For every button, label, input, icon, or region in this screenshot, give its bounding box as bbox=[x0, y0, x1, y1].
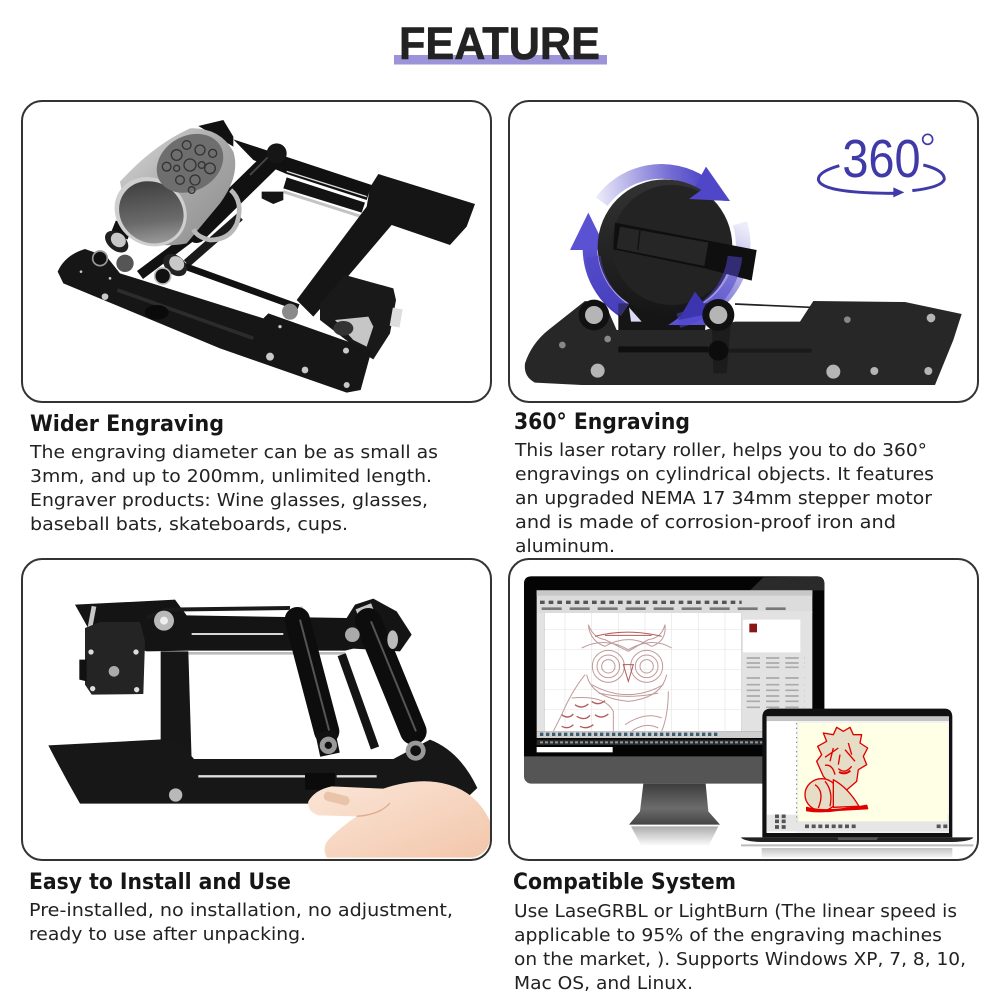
body text: and is made of corrosion-proof iron and bbox=[515, 512, 896, 533]
purple overlay on knob bbox=[678, 257, 735, 321]
vertical arm bbox=[161, 651, 192, 761]
red chibi line drawing bbox=[805, 727, 868, 812]
stepper motor bbox=[320, 275, 396, 359]
heading: Compatible System bbox=[513, 870, 736, 895]
body text: Mac OS, and Linux. bbox=[514, 973, 693, 994]
body text: applicable to 95% of the engraving machines bbox=[514, 925, 942, 946]
heading: Easy to Install and Use bbox=[29, 870, 291, 895]
drive belt bbox=[177, 263, 298, 307]
monitor bbox=[524, 576, 824, 846]
screws bbox=[80, 270, 350, 388]
panel frame bbox=[22, 101, 491, 402]
panel: 360 engraving bbox=[509, 101, 978, 557]
panel frame bbox=[509, 559, 978, 860]
product photo: rotary roller with mug bbox=[58, 120, 475, 393]
body text: This laser rotary roller, helps you to do 360° bbox=[514, 440, 927, 461]
hand bbox=[308, 781, 492, 860]
heading: 360° Engraving bbox=[514, 410, 690, 435]
body text: baseball bats, skateboards, cups. bbox=[30, 514, 348, 535]
body text: ready to use after unpacking. bbox=[29, 924, 306, 945]
heading: Wider Engraving bbox=[30, 412, 224, 437]
handle bbox=[613, 223, 757, 281]
owl line drawing bbox=[553, 625, 672, 731]
product photo: roller with hand bbox=[48, 599, 492, 860]
body text bbox=[29, 442, 438, 535]
base plate bbox=[58, 249, 372, 393]
panel frame bbox=[509, 101, 978, 402]
rollers bbox=[295, 606, 426, 761]
title text: FEATURE bbox=[399, 18, 600, 69]
title bbox=[394, 18, 607, 69]
software on monitor and laptop bbox=[524, 576, 973, 860]
body text: Use LaseGRBL or LightBurn (The linear speed is bbox=[514, 901, 957, 922]
panel: compatible system bbox=[509, 559, 978, 994]
panel: easy to install and use bbox=[22, 559, 492, 945]
body text: aluminum. bbox=[515, 536, 615, 557]
rear frame bbox=[75, 599, 412, 651]
360 degree icon bbox=[818, 130, 944, 197]
body text: Pre-installed, no installation, no adjustment, bbox=[29, 900, 453, 921]
mug bbox=[101, 122, 239, 260]
laptop bbox=[741, 709, 973, 860]
body text: Engraver products: Wine glasses, glasses, bbox=[30, 490, 428, 511]
body text bbox=[514, 901, 966, 994]
body text: on the market, ). Supports Windows XP, 7, 8, 10, bbox=[514, 949, 966, 970]
rollers and screws bbox=[559, 299, 935, 379]
body text: 3mm, and up to 200mm, unlimited length. bbox=[30, 466, 432, 487]
body text bbox=[514, 440, 934, 557]
360 degree icon: 360 bbox=[842, 130, 921, 189]
cross arm and rear plate bbox=[297, 174, 475, 317]
panel: wider engraving bbox=[22, 101, 491, 535]
base plate bbox=[525, 301, 962, 385]
rollers bbox=[197, 155, 277, 233]
body text: an upgraded NEMA 17 34mm stepper motor bbox=[515, 488, 933, 509]
pulleys bbox=[93, 226, 298, 320]
motor bbox=[79, 622, 145, 695]
panel frame bbox=[22, 559, 491, 860]
rotation arrows behind bbox=[570, 167, 743, 321]
base plate bbox=[48, 739, 477, 804]
body text: The engraving diameter can be as small as bbox=[29, 442, 438, 463]
body text bbox=[29, 900, 453, 945]
product photo: side view with rotation arrows bbox=[525, 130, 962, 385]
body text: engravings on cylindrical objects. It features bbox=[515, 464, 934, 485]
title underline bbox=[394, 55, 607, 64]
rotary knob bbox=[598, 179, 732, 314]
